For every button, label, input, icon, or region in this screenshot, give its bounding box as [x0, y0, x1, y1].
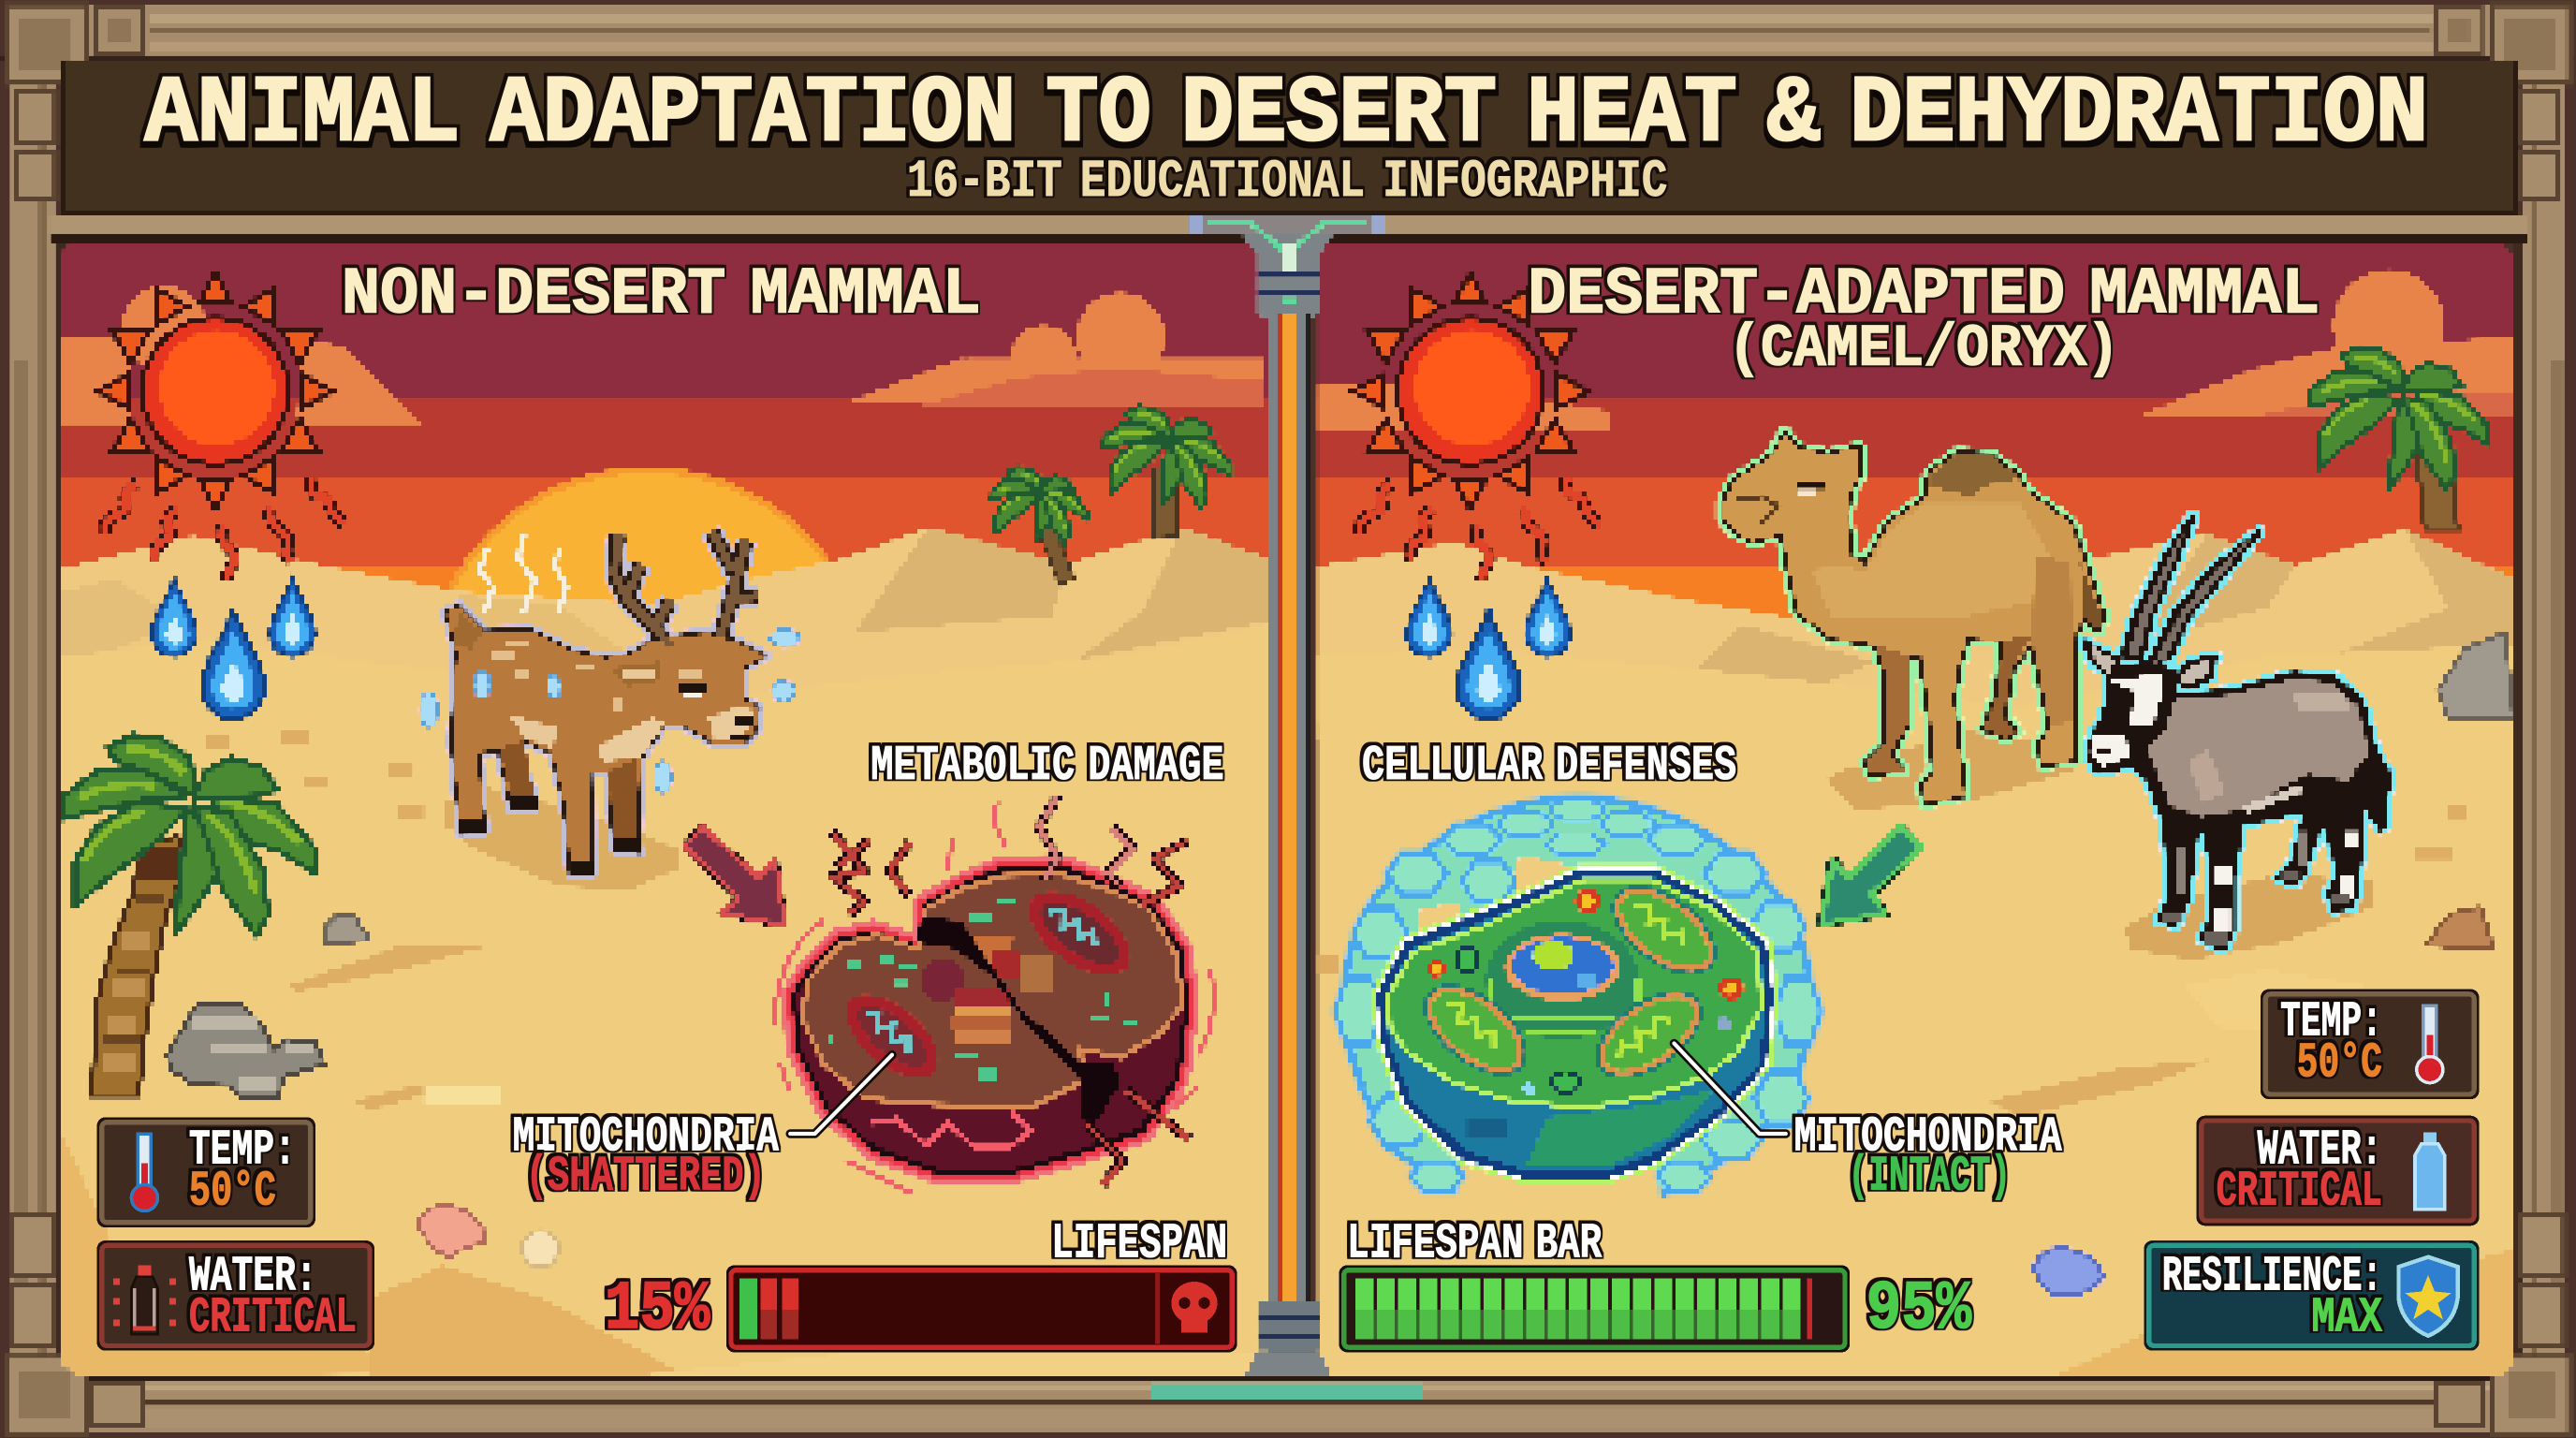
heading: desert-adapted mammal: DESERT-ADAPTED MAMMAL — [1528, 258, 2320, 332]
icon: thermometer — [2417, 1005, 2443, 1083]
sweat drops — [420, 629, 799, 793]
heading: non-desert mammal: NON-DESERT MAMMAL — [342, 258, 981, 332]
arrow: to protected cell — [1822, 826, 1921, 924]
sand ground — [63, 624, 1268, 1380]
central pipe — [1150, 215, 1423, 1399]
percent right: 95% — [1866, 1271, 1972, 1349]
icon: red sun — [97, 272, 333, 509]
clouds — [63, 286, 1265, 424]
panel: non-desert mammal scene — [63, 240, 1268, 1380]
damaged cell — [774, 796, 1213, 1194]
hud: temperature left — [97, 1117, 315, 1227]
label: mitochondria shattered — [513, 1109, 779, 1205]
heat arcs — [774, 802, 1213, 1194]
label: metabolic damage: METABOLIC DAMAGE — [871, 738, 1224, 794]
deer hooves — [461, 796, 641, 877]
nucleus — [1486, 920, 1641, 1039]
label: mitochondria intact: (INTACT) — [1848, 1149, 2011, 1205]
teal fragments — [827, 897, 1137, 1079]
oryx shadow — [2126, 874, 2375, 961]
hud: water left: CRITICAL — [189, 1290, 357, 1346]
hud: resilience: RESILIENCE: — [2162, 1249, 2382, 1305]
lifespan bar right — [1339, 1265, 1850, 1352]
icon: heat waves — [1359, 478, 1600, 581]
deer shadow — [443, 786, 681, 889]
connector line: right mitochondria — [1674, 1043, 1786, 1134]
shell — [2034, 1248, 2103, 1296]
hud: temperature right: TEMP: — [2280, 994, 2382, 1050]
clouds — [1314, 270, 2513, 431]
far dunes — [1314, 529, 2513, 740]
deer outline — [446, 531, 765, 873]
camel and oryx — [1724, 433, 2389, 961]
camel — [1724, 433, 2102, 802]
mitochondrion shattered right — [1015, 875, 1145, 991]
hud: water right: CRITICAL — [2217, 1163, 2382, 1219]
sand streaks — [205, 731, 493, 1110]
icon: full bottle — [2415, 1132, 2445, 1210]
big palm — [63, 735, 315, 1095]
heading: camel and oryx: (CAMEL/ORYX) — [1728, 315, 2119, 383]
squiggles — [774, 796, 1213, 1194]
subtitle: 16-BIT EDUCATIONAL INFOGRAPHIC — [907, 152, 1667, 212]
arrow: down to damaged cell — [685, 827, 784, 925]
sand ground — [1314, 644, 2513, 1380]
lifespan label right: LIFESPAN BAR — [1347, 1216, 1603, 1272]
oryx — [2085, 516, 2389, 949]
hud: resilience — [2144, 1240, 2479, 1351]
rocks — [2425, 633, 2513, 949]
mitochondrion shattered left — [832, 979, 953, 1093]
icon: empty bottle — [113, 1265, 176, 1334]
label: mitochondria shattered: MITOCHONDRIA — [513, 1109, 779, 1166]
shattered nucleus — [920, 936, 1055, 1042]
label: mitochondria intact — [1794, 1109, 2062, 1205]
zigzag — [871, 1112, 1032, 1147]
steam — [479, 534, 566, 613]
percent left: 15% — [605, 1271, 710, 1349]
deer body — [446, 531, 765, 873]
hud: water left: WATER: — [189, 1249, 317, 1305]
icon: red sun — [1352, 272, 1588, 509]
connector line: left mitochondria — [790, 1055, 892, 1134]
hud: temperature right: 50°C — [2297, 1035, 2382, 1092]
icon: thermometer — [131, 1134, 157, 1211]
camel shadow — [1826, 727, 2075, 810]
lifespan bar left — [726, 1265, 1237, 1352]
protected cell — [1335, 798, 1822, 1196]
icon: water drops — [152, 578, 315, 719]
label: cellular defenses: CELLULAR DEFENSES — [1362, 738, 1736, 794]
hud: temperature left: TEMP: — [189, 1123, 296, 1179]
mitochondria intact — [1406, 868, 1734, 1096]
sand streaks — [1314, 805, 2467, 1117]
shells — [417, 1206, 559, 1267]
organelles — [1427, 889, 1744, 1095]
title: ANIMAL ADAPTATION TO DESERT HEAT & DEHYDRATION — [144, 63, 2428, 169]
icon: shield with star — [2398, 1257, 2458, 1336]
icon: heat waves — [105, 478, 345, 581]
hud: resilience: MAX — [2311, 1290, 2382, 1346]
hud: temperature right — [2261, 990, 2479, 1099]
panel: desert-adapted mammal scene — [1314, 240, 2520, 1380]
hud: water left — [97, 1240, 374, 1351]
cell silhouette — [789, 861, 1192, 1177]
lifespan label left: LIFESPAN — [1051, 1216, 1227, 1272]
hud: water right — [2197, 1116, 2479, 1225]
label: mitochondria intact: MITOCHONDRIA — [1794, 1109, 2062, 1166]
hud: water right: WATER: — [2258, 1123, 2382, 1179]
label: mitochondria shattered: (SHATTERED) — [526, 1149, 766, 1205]
sky bands — [61, 243, 1268, 590]
rocks — [167, 916, 370, 1098]
small palms — [991, 406, 1231, 585]
far dunes — [61, 529, 1268, 693]
setting sun — [449, 468, 828, 604]
icon: skull — [1171, 1282, 1218, 1332]
bar segments — [1355, 1278, 1801, 1339]
hex shield — [1335, 798, 1822, 1196]
header panel — [63, 59, 2517, 215]
deer — [420, 531, 799, 925]
sky bands — [1314, 240, 2520, 723]
hud: temperature left: 50°C — [189, 1163, 276, 1219]
crack — [917, 917, 1120, 1130]
palm — [2309, 346, 2489, 529]
cell body — [1379, 871, 1771, 1177]
icon: water drops — [1407, 578, 1570, 719]
